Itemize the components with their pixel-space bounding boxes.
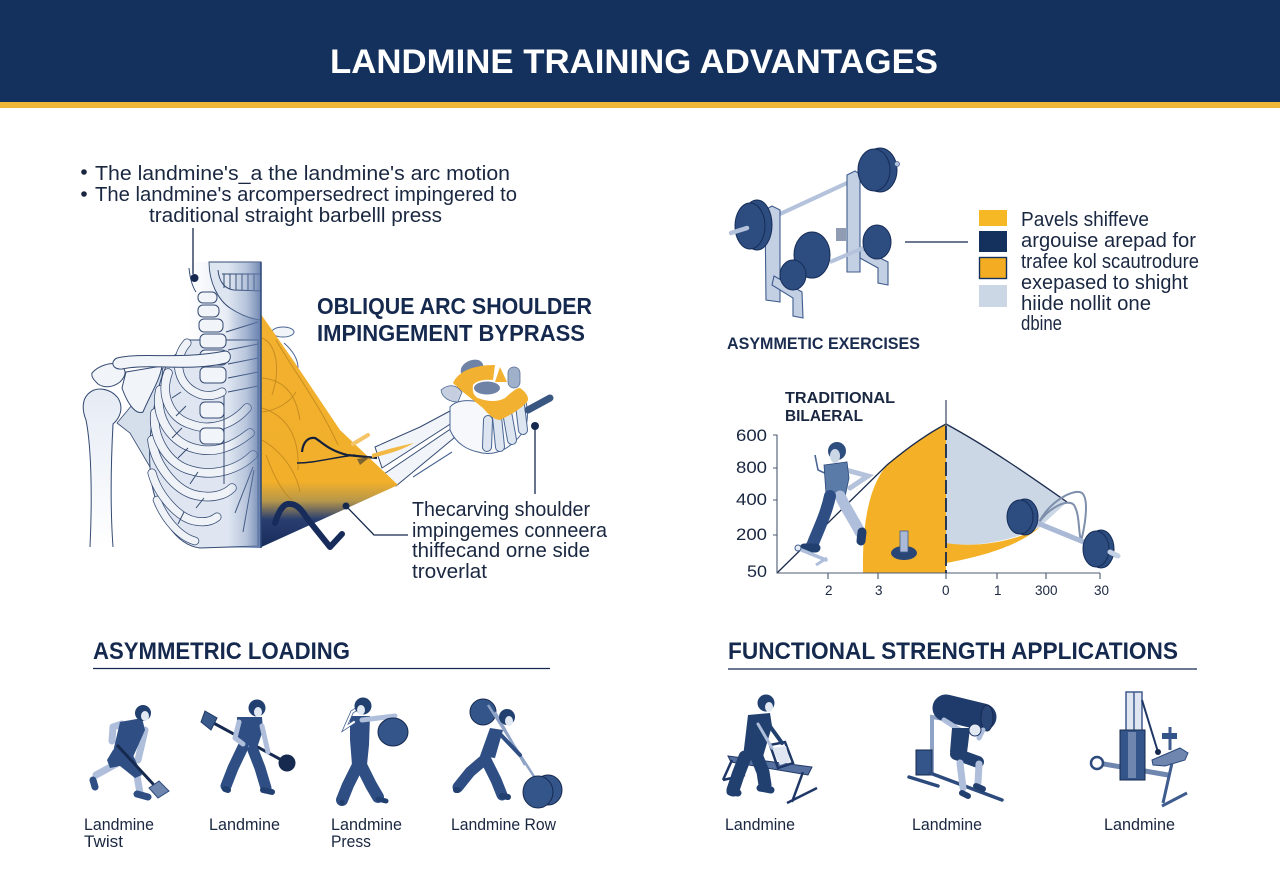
lower bar — [830, 243, 875, 262]
legend text — [1021, 209, 1199, 335]
section heading: ASYMMETRIC LOADING — [93, 638, 350, 665]
spine divider — [260, 262, 262, 548]
y axis labels: 400 — [736, 490, 767, 509]
curves — [777, 424, 1067, 573]
x axis labels: 300 — [1035, 583, 1058, 598]
y axis labels: 200 — [736, 525, 767, 544]
caption: landmine twist: Landmine — [84, 815, 154, 834]
x axis labels: 1 — [994, 583, 1002, 598]
figure: landmine row — [456, 699, 562, 808]
scapula — [122, 366, 162, 413]
illustration: landmine rack — [731, 148, 900, 318]
upper bar — [780, 172, 873, 214]
legend text: argouise arepad for — [1021, 230, 1196, 252]
back foot — [860, 248, 888, 285]
connector line to legend — [905, 241, 968, 243]
figure: landmine press — [342, 698, 408, 803]
upper rib arc — [179, 322, 258, 396]
figure: bench athlete — [723, 694, 817, 803]
caption: landmine press: Press — [331, 832, 371, 851]
figure: lunging athlete — [795, 442, 868, 565]
rib cage — [150, 340, 258, 548]
chart: arc comparison — [736, 390, 1118, 598]
heading: oblique arc: IMPINGEMENT BYPRASS — [317, 320, 585, 346]
spine shading panel — [190, 262, 261, 548]
arm bones — [375, 411, 454, 486]
center plate — [794, 232, 830, 278]
caption: landmine twist: Twist — [84, 832, 123, 851]
text block: arc motion bullets — [81, 163, 517, 227]
legend — [979, 209, 1199, 335]
right plate — [863, 225, 891, 259]
figure: landmine — [201, 700, 296, 792]
cervical and thoracic spine — [198, 292, 227, 444]
callout text: carving shoulder: thiffecand orne side — [412, 540, 590, 562]
header banner — [0, 0, 1280, 108]
yellow streaks — [353, 435, 414, 458]
heading: oblique arc: OBLIQUE ARC SHOULDER — [317, 293, 592, 319]
center divider — [945, 400, 947, 573]
acromion — [92, 363, 125, 387]
chart label: BILAERAL — [785, 408, 863, 425]
figure: cable machine — [1091, 692, 1188, 806]
axes — [773, 435, 1100, 579]
swatch: pale blue — [979, 285, 1007, 307]
caption: landmine: Landmine — [209, 815, 280, 834]
y axis labels: 600 — [736, 426, 767, 445]
caption: landmine 2: Landmine — [912, 815, 982, 834]
caption: landmine press: Landmine — [331, 815, 402, 834]
text block: arc motion bullets: The landmine's_a the landmine's arc motion — [95, 163, 510, 185]
label: asymmetric exercises: ASYMMETIC EXERCISES — [727, 335, 920, 353]
callout text: carving shoulder — [412, 499, 608, 583]
section: asymmetric loading — [84, 638, 562, 851]
leader line: triangle to callout — [342, 502, 408, 535]
legend text: dbine — [1021, 313, 1062, 335]
black squiggle — [297, 438, 377, 465]
left plate — [731, 200, 772, 250]
caption: landmine 3: Landmine — [1104, 815, 1175, 834]
small plate — [780, 260, 806, 290]
x axis labels: 30 — [1094, 583, 1109, 598]
triangle interior lines — [262, 338, 338, 500]
illustration: skeleton with arc — [83, 262, 550, 548]
leader line: hand to callout — [531, 422, 539, 494]
icon: floor landmine — [891, 531, 917, 560]
legend text: Pavels shiffeve — [1021, 209, 1149, 231]
y axis labels: 50 — [747, 562, 767, 581]
text block: arc motion bullets: traditional straight barbelll press — [149, 205, 442, 227]
icon: arced barbell — [1007, 492, 1118, 568]
caption: landmine twist — [84, 815, 154, 851]
front post — [765, 206, 780, 302]
clavicle — [113, 351, 230, 369]
title: LANDMINE TRAINING ADVANTAGES — [330, 43, 938, 81]
skull and jaw — [189, 262, 261, 320]
caption: landmine 1: Landmine — [725, 815, 795, 834]
y axis labels: 800 — [736, 458, 767, 477]
heading: oblique arc — [317, 293, 592, 346]
legend text: exepased to shight — [1021, 272, 1188, 294]
edge shading over ribs — [228, 262, 261, 548]
figure: squat with roll — [909, 705, 1002, 800]
chart label: TRADITIONAL — [785, 390, 895, 407]
callout text: carving shoulder: impingemes conneera — [412, 520, 608, 542]
area: yellow left — [863, 424, 946, 573]
figure: landmine twist — [93, 705, 169, 798]
section: functional strength applications — [723, 638, 1197, 834]
swatch: yellow — [979, 210, 1007, 226]
bracket — [836, 228, 846, 241]
callout text: carving shoulder: Thecarving shoulder — [412, 499, 590, 521]
x axis labels: 3 — [875, 583, 883, 598]
clavicle stub behind triangle — [272, 327, 294, 337]
hand — [450, 401, 528, 454]
area: yellow lower right — [946, 527, 1040, 563]
rear post — [847, 171, 860, 272]
caption: landmine row: Landmine Row — [451, 815, 557, 834]
front foot — [772, 276, 803, 318]
legend text: hiide nollit one — [1021, 293, 1151, 315]
zigzag navy cable — [275, 504, 342, 547]
x axis labels — [825, 583, 1109, 598]
rear plate — [858, 148, 900, 192]
caption: landmine press — [331, 815, 402, 851]
area: pale right — [946, 424, 1067, 545]
chart label — [785, 390, 895, 425]
humerus — [83, 389, 121, 547]
arc triangle — [262, 315, 398, 547]
text block: arc motion bullets: The landmine's arcompersedrect impingered to — [95, 184, 517, 206]
leader line: bullets to skeleton — [190, 228, 198, 282]
underarm shading — [117, 368, 163, 467]
bar handle — [528, 398, 550, 410]
swatch: navy — [979, 231, 1007, 252]
x axis labels: 2 — [825, 583, 833, 598]
callout text: carving shoulder: troverlat — [412, 561, 487, 583]
legend text: trafee kol scautrodure — [1021, 251, 1199, 273]
y axis labels — [736, 426, 767, 581]
section heading: FUNCTIONAL STRENGTH APPLICATIONS — [728, 638, 1178, 665]
scapula edge behind triangle — [284, 343, 298, 368]
gold rotation arrow — [441, 360, 528, 420]
x axis labels: 0 — [942, 583, 950, 598]
swatch: amber outlined — [980, 258, 1006, 278]
